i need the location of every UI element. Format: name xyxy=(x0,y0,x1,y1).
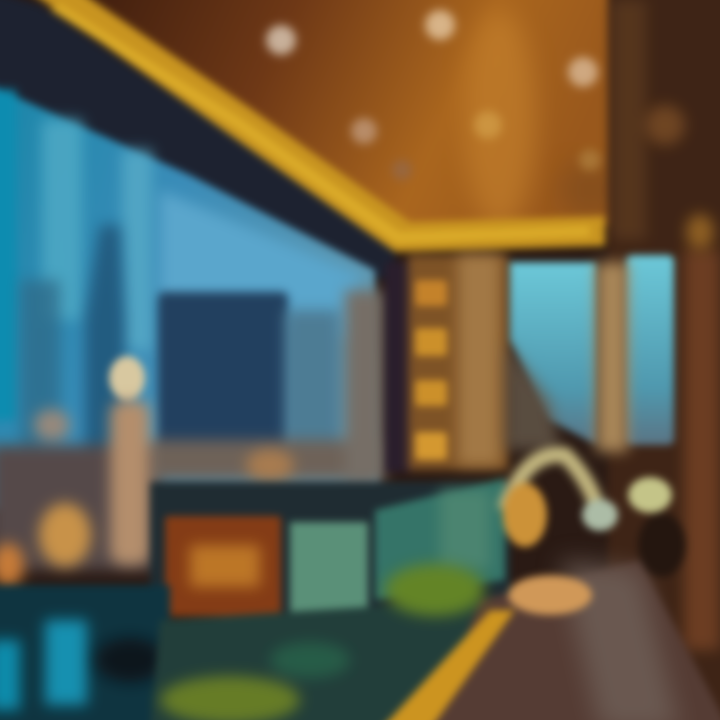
central golden column xyxy=(385,255,508,472)
warm lower city xyxy=(0,445,160,570)
lower left water reflection xyxy=(0,585,170,720)
skyline windows xyxy=(0,85,385,587)
green panels xyxy=(290,522,368,614)
golden floor strip xyxy=(380,610,515,720)
counter sign xyxy=(165,516,281,616)
tower dark xyxy=(158,292,288,462)
ceiling panel xyxy=(70,0,625,232)
ceiling lights xyxy=(266,10,601,180)
dark band under beam xyxy=(0,0,395,285)
right windows xyxy=(505,255,674,452)
right wall column xyxy=(608,0,720,720)
yellow ceiling beam xyxy=(28,0,605,252)
slim tower xyxy=(85,225,125,460)
floor and foreground xyxy=(150,560,720,720)
lit sculpture xyxy=(503,455,686,615)
green plants xyxy=(160,564,485,720)
reception counter xyxy=(150,478,510,616)
